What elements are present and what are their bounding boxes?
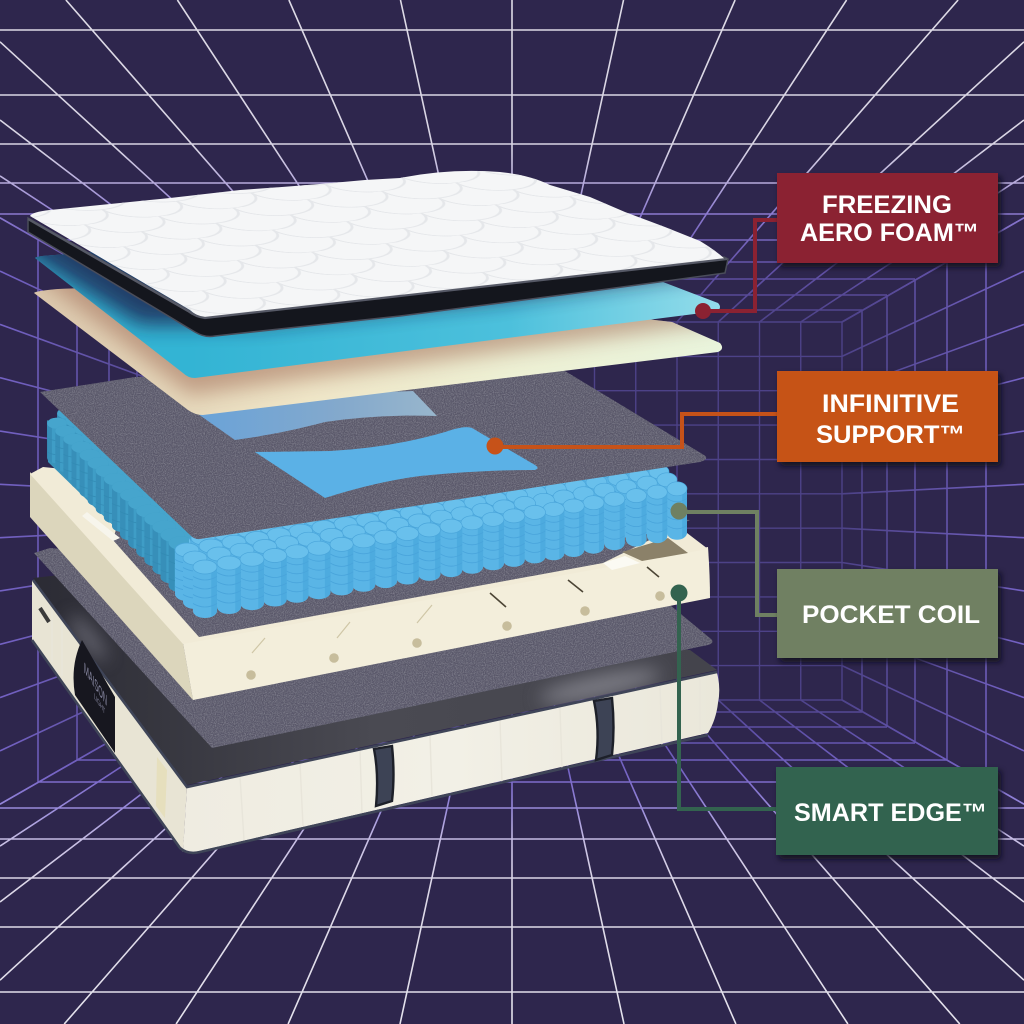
frame front face <box>183 547 710 700</box>
translucent blue zone panel <box>198 391 437 440</box>
connector: smart edge <box>670 584 777 809</box>
connector: infinitive support <box>486 414 777 454</box>
bottom mattress base <box>32 575 719 853</box>
coil block fill <box>47 420 195 600</box>
brand label on side: MAISON <box>84 659 107 711</box>
label: freezing aero foam: FREEZING <box>822 191 952 219</box>
label: smart edge <box>776 767 998 855</box>
connector: freezing aero foam <box>695 220 777 319</box>
top surface highlights <box>65 612 663 710</box>
side ribs <box>52 610 700 840</box>
right wall grid <box>842 218 1024 804</box>
white quilted surface <box>30 171 725 318</box>
label: pocket coil: POCKET COIL <box>802 601 980 629</box>
label: pocket coil <box>777 569 998 658</box>
front handle right <box>594 698 614 760</box>
ceiling grid <box>0 0 1024 322</box>
lower felt layer <box>34 548 712 748</box>
frame holes <box>246 591 665 680</box>
care tag <box>156 757 167 818</box>
back wall grid <box>182 322 842 700</box>
blue support zone panel <box>255 427 538 498</box>
front coil row <box>193 482 687 618</box>
floor grid <box>0 700 1024 1024</box>
smart edge foam frame <box>30 467 710 700</box>
frame corner inserts <box>603 556 640 570</box>
coil side rows <box>57 408 203 582</box>
frame left face <box>30 472 193 700</box>
left wall grid <box>0 218 182 804</box>
upper felt layer <box>40 368 706 539</box>
mattress left side <box>32 580 187 852</box>
black side band <box>28 218 728 336</box>
mattress front side <box>183 673 719 852</box>
label: freezing aero foam: AERO FOAM™ <box>800 219 979 247</box>
frame inner felt <box>113 480 690 637</box>
freezing aero foam blue layer <box>35 252 720 378</box>
quilted top comfort layer <box>28 171 728 336</box>
label: infinitive support: SUPPORT™ <box>816 421 965 449</box>
connector: pocket coil <box>670 502 777 615</box>
mattress top surface <box>33 575 717 785</box>
back coil rows <box>189 470 649 548</box>
top piping <box>28 219 727 318</box>
label: infinitive support <box>777 371 998 462</box>
brand label on side: LIGHT <box>94 691 105 717</box>
frame top surface <box>30 467 708 644</box>
label: infinitive support: INFINITIVE <box>822 390 959 418</box>
cream foam layer <box>34 288 722 415</box>
front handle left <box>374 746 394 806</box>
top and bottom piping <box>32 580 717 853</box>
small brand mark on side <box>40 608 49 622</box>
label: freezing aero foam <box>777 173 998 263</box>
pocket coil layer <box>47 408 687 618</box>
brand label on side <box>74 640 115 753</box>
frame slits <box>490 567 659 607</box>
quilted scallop pattern <box>30 171 725 318</box>
label: smart edge: SMART EDGE™ <box>794 799 987 827</box>
